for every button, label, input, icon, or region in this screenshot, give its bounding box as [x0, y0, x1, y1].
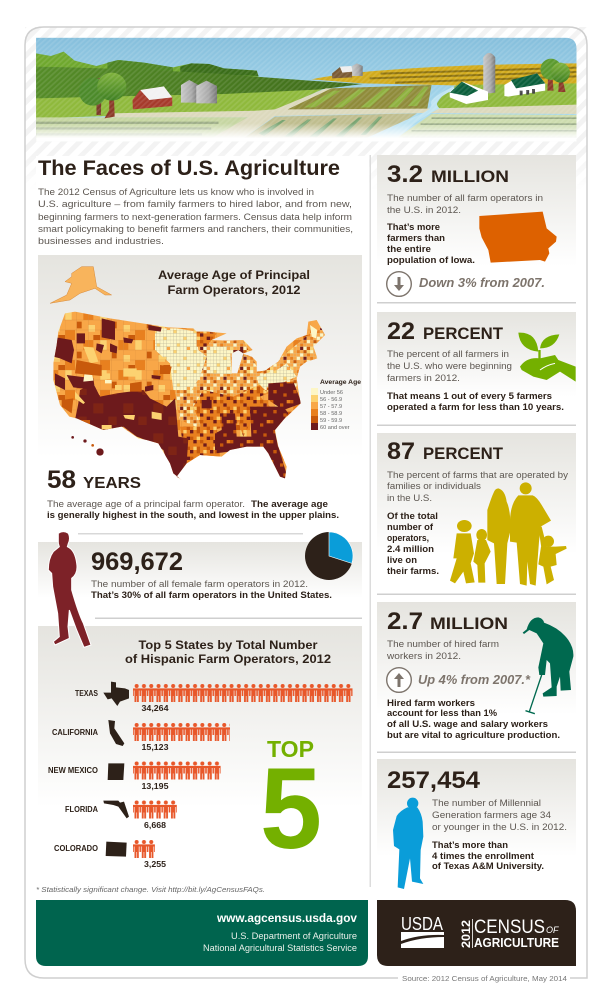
- panel: 2.7 million: of all U.S. wage and salary workers: [387, 719, 548, 729]
- intro text: beginning farmers to next-generation farmers. Census data help inform: [38, 212, 352, 223]
- panel: 87 percent: The percent of farms that are operated by: [387, 470, 568, 481]
- operator counts: 3,255: [144, 860, 166, 869]
- panel: 87 percent: number of: [387, 522, 434, 532]
- map legend: Under 56: [320, 390, 343, 396]
- choropleth map of the U.S.: [50, 267, 330, 483]
- state labels: NEW MEXICO: [48, 766, 98, 775]
- state labels: COLORADO: [54, 844, 98, 853]
- panel: 87 percent: 2.4 million: [387, 544, 434, 554]
- operator counts: 13,195: [142, 782, 169, 791]
- map title: [158, 268, 310, 297]
- map title: Average Age of Principal: [158, 268, 310, 282]
- panel: 257,454: 257,454: [387, 767, 481, 794]
- state shapes: [103, 682, 129, 857]
- panel: top 5 states: [38, 626, 362, 873]
- top 5 title: Top 5 States by Total Number: [138, 638, 318, 652]
- panel: 257,454: That’s more than: [432, 840, 508, 850]
- female operators text: The number of all female farm operators in 2012.: [91, 579, 308, 590]
- panel: 3.2 million: 3.2: [387, 161, 423, 188]
- icon: farm worker with hoe: [523, 617, 573, 714]
- icon: Iowa: [479, 212, 557, 263]
- panel: 87 percent: PERCENT: [423, 444, 504, 463]
- map legend: 60 and over: [320, 425, 350, 431]
- panel: 3.2 million: farmers than: [387, 233, 445, 243]
- top 5 title: [125, 638, 331, 666]
- operator counts: 34,264: [142, 704, 169, 713]
- intro text: The 2012 Census of Agriculture lets us know who is involved in: [38, 187, 314, 198]
- pie chart: 30 percent: [305, 532, 353, 580]
- stat: 58 years: The average age: [251, 499, 328, 509]
- intro text: businesses and industries.: [38, 236, 164, 247]
- state labels: TEXAS: [75, 689, 99, 698]
- stat: 58 years: YEARS: [83, 475, 141, 492]
- stat: 58 years: The average age of a principal farm operator.: [47, 499, 245, 510]
- panel: 3.2 million: The number of all farm operators in: [387, 193, 543, 204]
- panel: 3.2 million: MILLION: [431, 167, 509, 186]
- panel: 87 percent: operators,: [387, 533, 429, 543]
- big TOP 5: 5: [260, 745, 322, 873]
- census of agriculture logo: 2012: [461, 920, 473, 948]
- panel: 87 percent: Of the total: [387, 511, 438, 521]
- panel: 22 percent: That means 1 out of every 5 farmers: [387, 391, 552, 401]
- footer: green contact panel: U.S. Department of Agriculture: [231, 931, 357, 941]
- panel: 22 percent: PERCENT: [423, 324, 504, 343]
- panel: 22 percent: The percent of all farmers in: [387, 349, 509, 360]
- panel: 257,454: Generation farmers age 34: [432, 810, 552, 821]
- operator counts: 15,123: [142, 743, 169, 752]
- panel: 2.7 million: workers in 2012.: [386, 651, 461, 662]
- pictogram rows: [133, 684, 352, 858]
- panel: 2.7 million: but are vital to agriculture production.: [387, 730, 560, 740]
- white area under banner: [36, 156, 369, 256]
- stat: 969,672: 969,672: [91, 548, 183, 576]
- census of agriculture logo: AGRICULTURE: [474, 935, 559, 950]
- panel: 2.7 million: [377, 602, 576, 753]
- panel: 257,454: [377, 759, 576, 889]
- panel: 2.7 million: Up 4% from 2007.*: [418, 672, 531, 687]
- map legend: 56 - 56.9: [320, 397, 342, 403]
- panel: 257,454: The number of Millennial: [432, 798, 541, 809]
- panel: female operators: [38, 542, 362, 617]
- vertical divider: [370, 155, 371, 887]
- census of agriculture logo: CENSUS: [474, 917, 545, 938]
- state labels: FLORIDA: [65, 805, 98, 814]
- map legend: 59 - 59.9: [320, 418, 342, 424]
- panel: 3.2 million: Down 3% from 2007.: [419, 275, 545, 290]
- title: The Faces of U.S. Agriculture: [38, 157, 340, 180]
- footer: green contact panel: [36, 900, 368, 966]
- female operators text: That’s 30% of all farm operators in the United States.: [91, 590, 332, 600]
- map legend: 57 - 57.9: [320, 404, 342, 410]
- icon: family silhouette: [450, 482, 567, 586]
- map legend: 58 - 58.9: [320, 411, 342, 417]
- USDA logo: [401, 913, 444, 948]
- footnote: * Statistically significant change. Visit http://bit.ly/AgCensusFAQs.: [36, 885, 265, 894]
- panel: 3.2 million: the U.S. in 2012.: [387, 205, 461, 216]
- panel: 2.7 million: 2.7: [387, 608, 423, 635]
- icon: plant in hand: [518, 333, 576, 382]
- panel: 87 percent: 87: [387, 438, 415, 465]
- background stripes: [25, 27, 587, 163]
- map legend: [311, 380, 362, 431]
- divider line: [95, 618, 362, 619]
- intro text: U.S. agriculture – from family farmers to hired labor, and from new,: [38, 199, 352, 210]
- map title: Farm Operators, 2012: [168, 283, 301, 297]
- banner: farm landscape: [36, 38, 576, 142]
- icon: down arrow: [387, 272, 411, 296]
- panel: 257,454: or younger in the U.S. in 2012.: [432, 822, 567, 833]
- icon: young farmer silhouette: [393, 798, 423, 889]
- female operators text: [91, 579, 332, 600]
- icon: woman farmer silhouette: [48, 532, 91, 647]
- panel: 22 percent: [377, 312, 576, 426]
- stat: 58 years: is generally highest in the south, and lowest in the upper plains.: [47, 510, 339, 520]
- panel: 2.7 million: account for less than 1%: [387, 708, 498, 718]
- panel: 87 percent: in the U.S.: [387, 493, 432, 504]
- operator counts: [142, 704, 169, 869]
- footer: USDA census logo panel: [377, 900, 576, 966]
- panel: 3.2 million: That’s more: [387, 222, 440, 232]
- panel: 22 percent: operated a farm for less than 10 years.: [387, 402, 564, 412]
- census of agriculture logo: [461, 917, 559, 950]
- operator counts: 6,668: [144, 821, 166, 830]
- stat: 58 years: 58: [47, 466, 76, 494]
- panel: 87 percent: families or individuals: [387, 481, 481, 492]
- panel: 22 percent: farmers in 2012.: [387, 373, 460, 384]
- intro text: [38, 187, 353, 247]
- census of agriculture logo: OF: [546, 925, 559, 935]
- big TOP 5: TOP: [267, 736, 314, 762]
- state labels: CALIFORNIA: [52, 728, 98, 737]
- panel: 2.7 million: MILLION: [430, 614, 508, 633]
- source credit: Source: 2012 Census of Agriculture, May 2014: [402, 974, 567, 983]
- panel: 2.7 million: The number of hired farm: [387, 639, 499, 650]
- panel: average age map: [38, 255, 362, 525]
- footer: green contact panel: National Agricultural Statistics Service: [203, 943, 357, 953]
- panel: 3.2 million: [377, 155, 576, 304]
- panel: 257,454: of Texas A&M University.: [432, 861, 544, 871]
- USDA logo: USDA: [401, 913, 444, 934]
- panel: 87 percent: live on: [387, 555, 417, 565]
- panel: 257,454: 4 times the enrollment: [432, 851, 534, 861]
- panel: 22 percent: the U.S. who were beginning: [387, 361, 512, 372]
- panel: 87 percent: [377, 433, 576, 595]
- state labels: [48, 689, 99, 853]
- stat: 58 years: [47, 466, 339, 520]
- divider line: [78, 533, 303, 534]
- panel: 87 percent: their farms.: [387, 566, 439, 576]
- panel: 2.7 million: Hired farm workers: [387, 698, 475, 708]
- panel: 3.2 million: the entire: [387, 244, 431, 254]
- icon: up arrow: [387, 668, 411, 692]
- panel: 22 percent: 22: [387, 318, 415, 345]
- panel: 3.2 million: population of Iowa.: [387, 255, 475, 265]
- intro text: smart policymaking to benefit farmers and ranchers, their communities,: [38, 224, 353, 235]
- map legend: Average Age: [320, 380, 362, 386]
- footer: green contact panel: www.agcensus.usda.gov: [216, 913, 358, 925]
- top 5 title: of Hispanic Farm Operators, 2012: [125, 652, 331, 666]
